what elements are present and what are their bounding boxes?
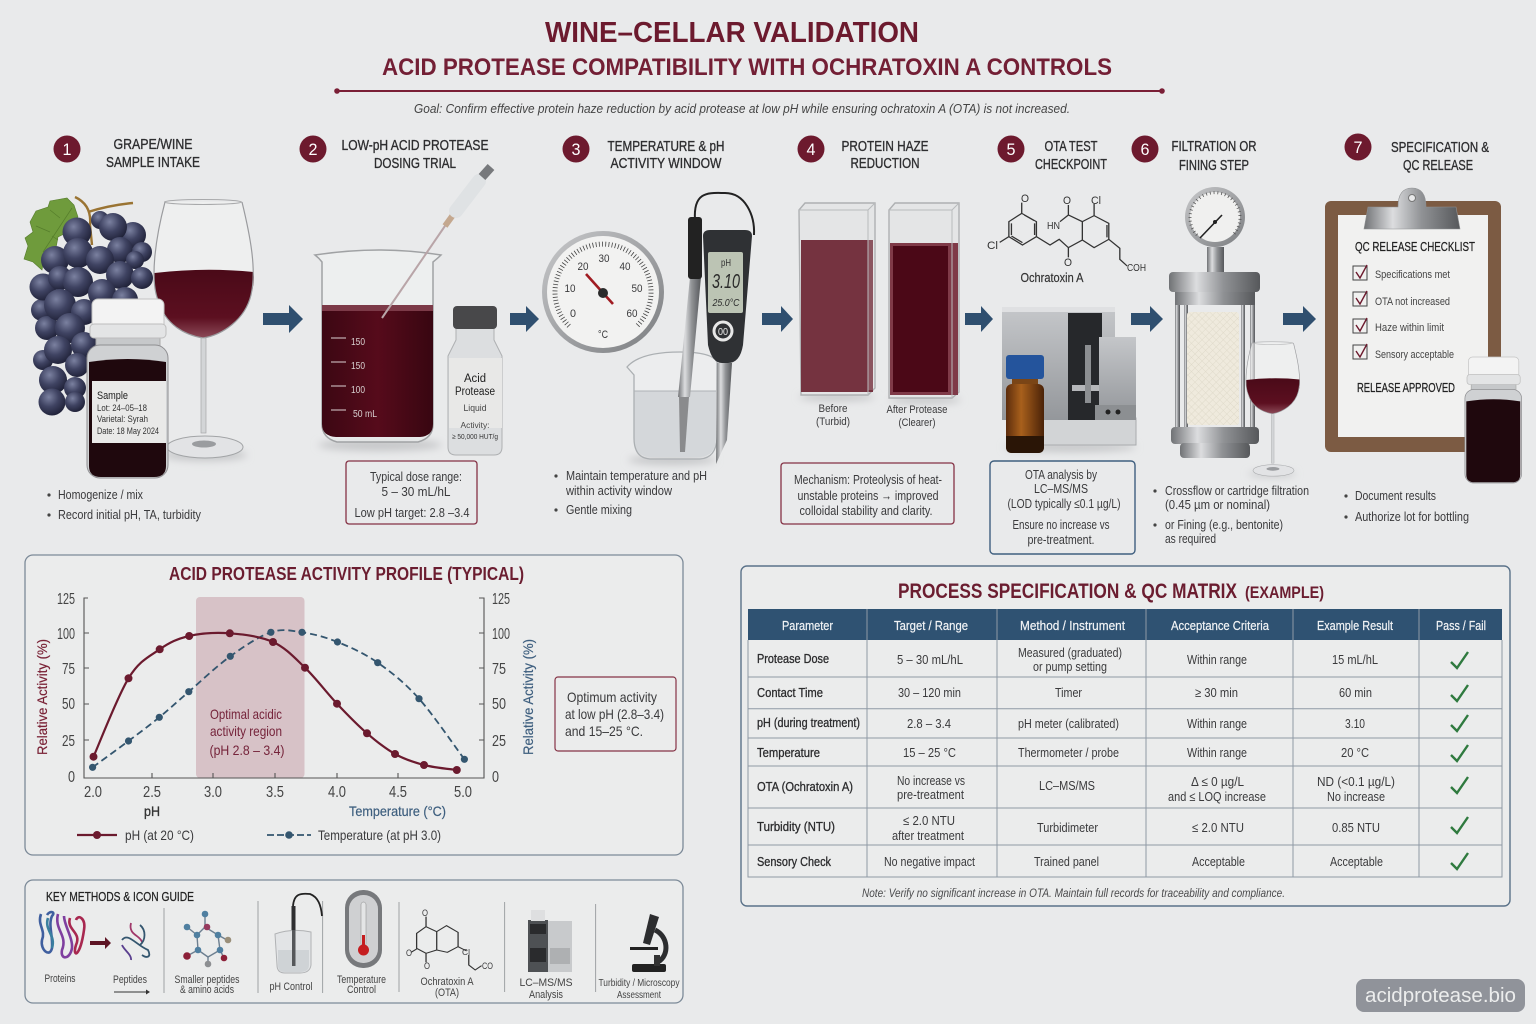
icon: proteins to peptides xyxy=(40,912,150,994)
step 2 heading xyxy=(300,136,488,172)
table title: PROCESS SPECIFICATION & QC MATRIX xyxy=(898,580,1237,603)
icon: ochratoxin A: O xyxy=(422,908,428,918)
icon: smaller peptides xyxy=(174,911,240,996)
icon: QC clipboard checklist: Haze within limit xyxy=(1375,322,1444,334)
left axis labels xyxy=(57,591,75,786)
icon: ochratoxin A structure: Cl xyxy=(1091,195,1101,207)
step 7 bullets xyxy=(1344,488,1469,524)
callout: OTA analysis: (LOD typically ≤0.1 µg/L) xyxy=(1008,496,1120,511)
step 4 heading: PROTEIN HAZE xyxy=(842,138,928,155)
left axis labels: 50 xyxy=(62,696,75,713)
optimal region band: Optimal acidic xyxy=(210,706,282,722)
icon: ochratoxin A structure xyxy=(987,193,1146,285)
guide heading: KEY METHODS & ICON GUIDE xyxy=(46,889,194,904)
callout: mechanism: colloidal stability and clarity. xyxy=(800,503,932,518)
step 7 heading xyxy=(1344,134,1489,174)
icon: microscope xyxy=(598,914,680,1001)
pass marks xyxy=(1451,652,1468,869)
acceptance column: Acceptable xyxy=(1192,854,1245,869)
table header: Parameter xyxy=(782,618,834,633)
icon: dial thermometer: 20 xyxy=(578,261,588,273)
parameter column: Turbidity (NTU) xyxy=(757,819,835,834)
icon: ochratoxin A structure: COH xyxy=(1127,263,1146,274)
chart legend: pH (at 20 °C) xyxy=(125,827,194,843)
step 2 heading: 2 xyxy=(308,140,318,159)
icon: ochratoxin A: CO xyxy=(482,961,493,971)
icon: small wine glass xyxy=(1246,342,1300,476)
before label xyxy=(816,403,850,428)
target range column: 30 – 120 min xyxy=(898,685,961,700)
right axis labels: 125 xyxy=(492,591,510,608)
method column: Trained panel xyxy=(1034,854,1099,869)
icon: water beaker xyxy=(627,352,717,459)
callout: mechanism xyxy=(781,463,954,524)
icon: beaker with wine and pipette: 100 xyxy=(351,385,365,396)
icon: temperature control: Control xyxy=(347,984,376,996)
arrow 1 to 2 xyxy=(263,305,303,333)
acceptance column: Within range xyxy=(1187,652,1247,667)
acceptance column: Δ ≤ 0 µg/L xyxy=(1191,774,1244,789)
target range column: after treatment xyxy=(892,828,964,843)
icon: ochratoxin A xyxy=(406,908,493,999)
icon: dial thermometer: 50 xyxy=(632,283,642,295)
optimal region band: activity region xyxy=(210,723,282,739)
table header: Acceptance Criteria xyxy=(1171,618,1270,633)
icon: filter housing with pressure gauge xyxy=(1169,187,1260,458)
icon: QC clipboard checklist: Specifications met xyxy=(1375,269,1450,281)
x axis labels: 3.5 xyxy=(266,784,284,801)
icon: pH meter with probes: 25.0°C xyxy=(712,298,740,309)
left axis title: Relative Activity (%) xyxy=(34,639,50,755)
step 7 heading: QC RELEASE xyxy=(1403,157,1473,174)
after label: After Protease xyxy=(886,404,948,416)
icon: pH meter with probes: 00 xyxy=(718,327,728,338)
target range column: pre-treatment xyxy=(897,787,964,802)
right axis labels xyxy=(492,591,510,786)
step 7 heading: 7 xyxy=(1354,138,1362,157)
step 2 heading: DOSING TRIAL xyxy=(374,155,456,172)
step 6 bullets: (0.45 µm or nominal) xyxy=(1165,497,1270,512)
example result column: 3.10 xyxy=(1345,716,1365,731)
right axis labels: 75 xyxy=(492,661,506,678)
x axis titles xyxy=(144,803,446,819)
step 3 heading: TEMPERATURE & pH xyxy=(608,138,724,155)
icon: sample bottle with label xyxy=(87,299,168,478)
step 1 heading: 1 xyxy=(62,140,72,159)
icon: beaker with wine and pipette: 50 mL xyxy=(353,409,377,420)
callout: dose range: 5 – 30 mL/hL xyxy=(382,484,450,499)
x axis labels xyxy=(84,784,472,801)
acceptance column: Within range xyxy=(1187,745,1247,760)
table header: Pass / Fail xyxy=(1436,618,1486,633)
checklist title: QC RELEASE CHECKLIST xyxy=(1355,239,1475,254)
step 1 heading: GRAPE/WINE xyxy=(114,136,192,153)
method column: or pump setting xyxy=(1033,659,1107,674)
example result column: 0.85 NTU xyxy=(1332,820,1380,835)
step 6 bullets: Crossflow or cartridge filtration xyxy=(1165,483,1309,498)
left axis labels: 0 xyxy=(68,769,75,786)
optimal region band: (pH 2.8 – 3.4) xyxy=(210,742,284,758)
icon: sample bottle with label: Date: 18 May 2024 xyxy=(97,426,159,436)
icon: dial thermometer: 10 xyxy=(564,283,576,295)
x axis labels: 3.0 xyxy=(204,784,222,801)
icon: LC-MS instrument xyxy=(1002,307,1136,445)
icon: wine glass xyxy=(154,200,254,458)
x axis titles: Temperature (°C) xyxy=(349,803,446,819)
acceptance column: and ≤ LOQ increase xyxy=(1168,789,1266,804)
icon: beaker with wine and pipette xyxy=(315,167,491,442)
table title: (EXAMPLE) xyxy=(1245,583,1324,602)
right axis labels: 100 xyxy=(492,626,510,643)
icon: QC clipboard checklist xyxy=(1325,188,1501,452)
icon: smaller peptides: & amino acids xyxy=(180,984,234,996)
step 5 heading: 5 xyxy=(1006,140,1016,159)
icon: sample bottle with label: Sample xyxy=(97,390,128,402)
step 7 heading: SPECIFICATION & xyxy=(1391,139,1489,156)
method column: Turbidimeter xyxy=(1037,820,1099,835)
callout: OTA analysis xyxy=(990,461,1135,554)
x axis labels: 4.5 xyxy=(389,784,407,801)
watermark: acidprotease.bio xyxy=(1365,985,1516,1007)
example result column: 15 mL/hL xyxy=(1332,652,1378,667)
right axis labels: 50 xyxy=(492,696,506,713)
watermark xyxy=(1356,979,1525,1012)
callout: mechanism: Mechanism: Proteolysis of heat- xyxy=(794,472,942,487)
step 3 bullets: within activity window xyxy=(565,483,673,498)
icon: acid protease vial xyxy=(448,306,502,455)
parameter column: OTA (Ochratoxin A) xyxy=(757,779,853,794)
callout: dose range xyxy=(346,461,477,524)
step 5 heading: CHECKPOINT xyxy=(1035,156,1107,173)
example result column xyxy=(1317,652,1395,869)
method column xyxy=(1018,645,1122,869)
step 1 bullets xyxy=(47,487,201,522)
icon: ochratoxin A structure: O xyxy=(1064,257,1072,269)
callout: optimum activity xyxy=(555,677,676,751)
icon: pH meter with probes xyxy=(678,193,754,464)
icon: pH control: pH Control xyxy=(270,981,312,993)
icon: acid protease vial: Activity: xyxy=(460,420,490,430)
icon: retained wine bottle xyxy=(1465,357,1522,483)
step 1 heading: SAMPLE INTAKE xyxy=(106,154,200,171)
callout: optimum activity: Optimum activity xyxy=(567,689,657,705)
icon: dial thermometer xyxy=(542,231,664,353)
arrow 3 to 4 xyxy=(762,306,793,332)
method column: LC–MS/MS xyxy=(1039,778,1095,793)
ochratoxin label: Ochratoxin A xyxy=(1020,270,1084,285)
icon: ochratoxin A: (OTA) xyxy=(435,987,459,999)
table header xyxy=(748,609,1502,640)
icon: ochratoxin A structure: O xyxy=(1021,193,1029,205)
callout: OTA analysis: OTA analysis by xyxy=(1025,467,1097,482)
example result column: No increase xyxy=(1327,789,1385,804)
step 3 heading xyxy=(562,136,724,172)
optimal region band xyxy=(196,597,304,778)
icon: acid protease vial: Liquid xyxy=(464,403,486,414)
icon: ochratoxin A: Ochratoxin A xyxy=(420,976,474,988)
step 6 heading: FILTRATION OR xyxy=(1172,138,1257,155)
icon: temperature control xyxy=(337,890,386,996)
icon: LC-MS analysis: LC–MS/MS xyxy=(520,977,572,989)
chart legend: Temperature (at pH 3.0) xyxy=(318,827,441,843)
table header: Method / Instrument xyxy=(1020,618,1125,633)
table note: Note: Verify no significant increase in OTA. Maintain full records for traceability and compliance. xyxy=(862,886,1285,900)
left axis labels: 125 xyxy=(57,591,75,608)
target range column: No increase vs xyxy=(897,773,965,788)
method column: Thermometer / probe xyxy=(1018,745,1119,760)
example result column: ND (<0.1 µg/L) xyxy=(1317,774,1395,789)
step 6 heading xyxy=(1132,136,1257,174)
title xyxy=(382,17,1112,81)
step 1 bullets: Record initial pH, TA, turbidity xyxy=(58,507,201,522)
icon: QC clipboard checklist: RELEASE APPROVED xyxy=(1357,380,1455,395)
icon: beaker with wine and pipette: 150 xyxy=(351,337,365,348)
step 6 bullets: as required xyxy=(1165,531,1216,546)
icon: dial thermometer: 30 xyxy=(598,253,610,265)
step 7 bullets: Authorize lot for bottling xyxy=(1355,509,1469,524)
step 5 heading: OTA TEST xyxy=(1044,138,1098,155)
panel: activity profile chart xyxy=(25,555,683,855)
step 3 bullets: Maintain temperature and pH xyxy=(566,468,707,483)
left axis labels: 75 xyxy=(62,661,75,678)
acceptance column xyxy=(1168,652,1266,869)
x axis labels: 2.0 xyxy=(84,784,102,801)
parameter column: Sensory Check xyxy=(757,854,831,869)
before label: Before xyxy=(818,403,848,415)
icon: smaller peptides: Smaller peptides xyxy=(174,974,240,986)
icon: sample bottle with label: Varietal: Syrah xyxy=(97,414,148,424)
icon: microscope: Turbidity / Microscopy xyxy=(598,977,680,989)
icon: LC-MS analysis xyxy=(520,910,572,1001)
chart title: ACID PROTEASE ACTIVITY PROFILE (TYPICAL) xyxy=(169,564,524,584)
step 7 bullets: Document results xyxy=(1355,488,1436,503)
callout: dose range: Typical dose range: xyxy=(370,469,462,484)
temperature curve xyxy=(89,629,468,771)
checklist items xyxy=(1353,265,1367,359)
icon: pH meter with probes: 3.10 xyxy=(712,271,740,293)
method column: pH meter (calibrated) xyxy=(1018,716,1119,731)
callout: optimum activity: and 15–25 °C. xyxy=(565,723,643,739)
target range column: 5 – 30 mL/hL xyxy=(897,652,963,667)
step 3 heading: ACTIVITY WINDOW xyxy=(610,155,722,172)
method column: Timer xyxy=(1055,685,1083,700)
icon: clear cuvette after xyxy=(886,203,959,429)
arrow 5 to 6 xyxy=(1131,306,1163,332)
icon: dial thermometer: 60 xyxy=(626,308,638,320)
target range column: ≤ 2.0 NTU xyxy=(903,813,955,828)
icon: acid protease vial: ≥ 50,000 HUT/g xyxy=(452,432,498,441)
icon: proteins to peptides: Proteins xyxy=(44,973,76,985)
step 1 heading xyxy=(54,136,200,171)
example result column: 20 °C xyxy=(1341,745,1369,760)
step 6 heading: 6 xyxy=(1140,140,1150,159)
step 6 bullets: or Fining (e.g., bentonite) xyxy=(1165,517,1283,532)
icon: sample bottle with label: Lot: 24–05–18 xyxy=(97,403,147,413)
example result column: 60 min xyxy=(1339,685,1372,700)
icon: QC clipboard checklist: Sensory acceptable xyxy=(1375,349,1454,361)
step 4 heading: REDUCTION xyxy=(850,155,920,172)
icon: temperature control: Temperature xyxy=(337,974,386,986)
x axis labels: 2.5 xyxy=(143,784,161,801)
callout: mechanism: unstable proteins → improved xyxy=(798,488,938,503)
table header: Example Result xyxy=(1317,618,1393,633)
parameter column xyxy=(757,651,860,869)
icon: dial thermometer: °C xyxy=(598,329,608,341)
arrow 4 to 5 xyxy=(965,306,993,332)
x axis titles: pH xyxy=(144,803,160,819)
right axis labels: 25 xyxy=(492,733,506,750)
icon: proteins to peptides: Peptides xyxy=(113,974,147,986)
parameter column: Temperature xyxy=(757,745,820,760)
goal statement: Goal: Confirm effective protein haze reduction by acid protease at low pH while ensuring ochratoxin A (OTA) is not increased. xyxy=(414,101,1070,116)
step 5 heading xyxy=(998,136,1107,173)
x axis labels: 4.0 xyxy=(328,784,346,801)
right axis labels: 0 xyxy=(492,769,499,786)
after label xyxy=(886,404,948,429)
left axis labels: 100 xyxy=(57,626,75,643)
step 2 heading: LOW-pH ACID PROTEASE xyxy=(342,137,488,154)
step 4 heading: 4 xyxy=(806,140,816,159)
step 3 bullets xyxy=(554,468,707,517)
callout: OTA analysis: LC–MS/MS xyxy=(1034,481,1088,496)
after label: (Clearer) xyxy=(898,417,936,429)
icon: ochratoxin A: Cl xyxy=(462,948,470,957)
parameter column: Protease Dose xyxy=(757,651,829,666)
icon: ochratoxin A structure: HN xyxy=(1047,221,1060,232)
step 6 heading: FINING STEP xyxy=(1179,157,1249,174)
acceptance column: ≤ 2.0 NTU xyxy=(1192,820,1244,835)
icon: grapes xyxy=(24,197,153,416)
arrow 6 to 7 xyxy=(1283,306,1316,332)
right axis title: Relative Activity (%) xyxy=(520,639,536,755)
icon: pH control xyxy=(270,894,322,993)
panel: process specification and QC matrix xyxy=(741,566,1510,906)
method column: Measured (graduated) xyxy=(1018,645,1122,660)
title: WINE–CELLAR VALIDATION xyxy=(545,17,919,49)
target range column xyxy=(884,652,975,869)
step 6 bullets xyxy=(1153,483,1309,546)
icon: amber standard bottle xyxy=(1006,355,1044,453)
example result column: Acceptable xyxy=(1330,854,1383,869)
step 1 bullets: Homogenize / mix xyxy=(58,487,143,502)
icon: ochratoxin A: O xyxy=(406,948,412,958)
icon: acid protease vial: Acid xyxy=(464,373,486,385)
step 3 bullets: Gentle mixing xyxy=(566,502,632,517)
icon: acid protease vial: Protease xyxy=(455,386,495,398)
icon: dial thermometer: 0 xyxy=(570,308,576,320)
icon: LC-MS analysis: Analysis xyxy=(529,989,563,1001)
callout: OTA analysis: pre-treatment. xyxy=(1028,532,1094,547)
acceptance column: Within range xyxy=(1187,716,1247,731)
subtitle: ACID PROTEASE COMPATIBILITY WITH OCHRATOXIN A CONTROLS xyxy=(382,54,1112,81)
target range column: 15 – 25 °C xyxy=(903,745,956,760)
before label: (Turbid) xyxy=(816,416,850,428)
callout: dose range: Low pH target: 2.8 –3.4 xyxy=(354,505,470,520)
icon: ochratoxin A: O xyxy=(424,961,430,971)
step 4 heading xyxy=(798,136,928,172)
arrow 2 to 3 xyxy=(510,306,539,332)
parameter column: pH (during treatment) xyxy=(757,715,860,730)
x axis labels: 5.0 xyxy=(454,784,472,801)
acceptance column: ≥ 30 min xyxy=(1195,685,1238,700)
icon: turbid cuvette before xyxy=(799,203,875,428)
icon: pH meter with probes: pH xyxy=(721,258,731,269)
chart legend xyxy=(77,827,441,843)
step 3 heading: 3 xyxy=(572,140,580,159)
parameter column: Contact Time xyxy=(757,685,823,700)
icon: ochratoxin A structure: O xyxy=(1063,195,1071,207)
icon: ochratoxin A structure: Cl xyxy=(987,240,998,252)
icon: QC clipboard checklist: OTA not increased xyxy=(1375,296,1450,308)
table header: Target / Range xyxy=(894,618,968,633)
icon: microscope: Assessment xyxy=(617,989,661,1001)
target range column: 2.8 – 3.4 xyxy=(907,716,951,731)
pH curve xyxy=(90,629,461,774)
callout: OTA analysis: Ensure no increase vs xyxy=(1012,517,1110,532)
panel: key methods and icon guide xyxy=(25,880,683,1003)
icon: beaker with wine and pipette: 150 xyxy=(351,361,365,372)
left axis labels: 25 xyxy=(62,733,75,750)
callout: optimum activity: at low pH (2.8–3.4) xyxy=(565,706,664,722)
target range column: No negative impact xyxy=(884,854,975,869)
icon: dial thermometer: 40 xyxy=(620,261,630,273)
